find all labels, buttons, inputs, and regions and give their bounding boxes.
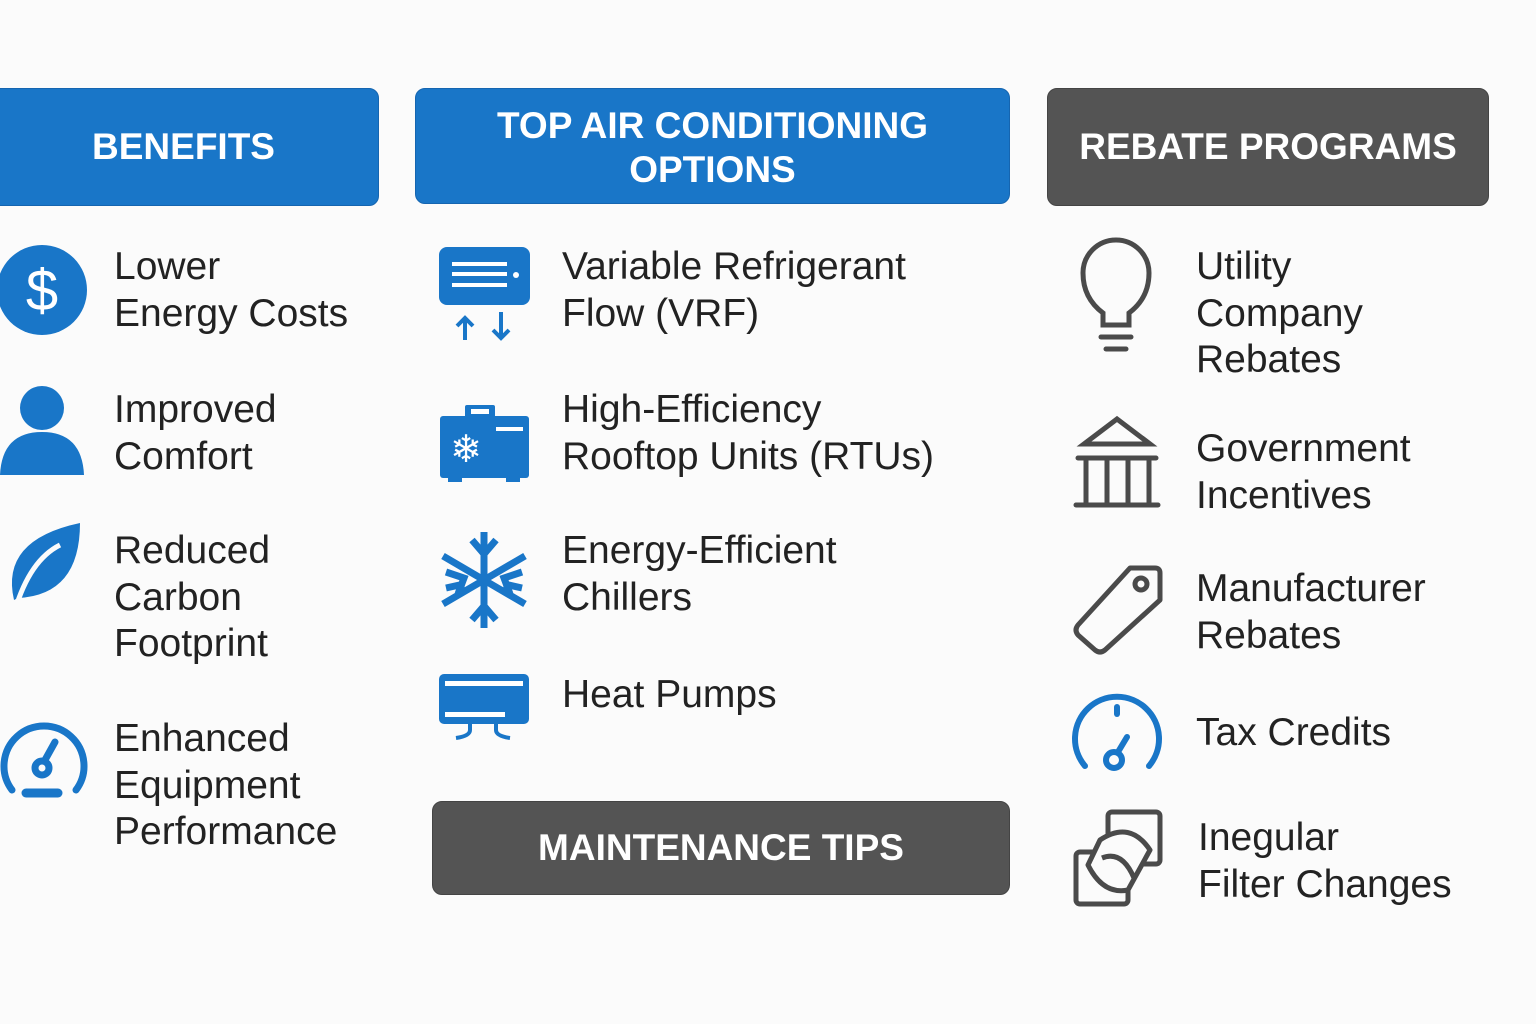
header: top air conditioning options: TOP AIR CONDITIONING [497, 105, 928, 146]
text: VRF: Flow (VRF) [562, 292, 759, 334]
icon: heat pump [439, 674, 529, 738]
text: utility rebates: Company [1196, 292, 1363, 334]
header: rebate programs [1047, 88, 1489, 206]
icon: dollar [0, 245, 87, 335]
text: enhanced equipment performance [114, 717, 337, 853]
text: chillers: Chillers [562, 576, 692, 618]
text: reduced carbon footprint: Carbon [114, 576, 242, 618]
header: top air conditioning options: OPTIONS [629, 149, 796, 190]
text: enhanced equipment performance: Performance [114, 810, 337, 853]
icon: price tag [1076, 568, 1160, 652]
text: RTUs: High-Efficiency [562, 388, 821, 431]
header: top air conditioning options [415, 88, 1010, 204]
text: RTUs: Rooftop Units (RTUs) [562, 434, 934, 478]
text: chillers [562, 529, 837, 618]
text: filter changes: Filter Changes [1198, 862, 1452, 906]
text: VRF: Variable Refrigerant [562, 245, 906, 288]
icon: government building [1076, 419, 1158, 505]
icon: person [0, 386, 84, 475]
header: benefits [0, 88, 379, 206]
icon: lightbulb [1083, 240, 1149, 349]
text: government incentives: Government [1196, 427, 1411, 470]
text: lower energy costs: Lower [114, 245, 220, 288]
text: manufacturer rebates [1196, 567, 1426, 656]
text: chillers: Energy-Efficient [562, 529, 837, 572]
icon: tax gauge [1075, 697, 1159, 768]
icon: dollar: $ [26, 258, 58, 323]
text: improved comfort [114, 388, 277, 478]
text: lower energy costs [114, 245, 348, 334]
text: reduced carbon footprint [114, 529, 270, 665]
icon: rooftop unit [440, 405, 529, 482]
text: tax credits: Tax Credits [1196, 711, 1391, 754]
header: rebate programs: REBATE PROGRAMS [1079, 126, 1457, 167]
text: utility rebates: Rebates [1196, 338, 1341, 381]
icon: leaf [12, 523, 80, 610]
text: utility rebates: Utility [1196, 245, 1291, 288]
header: maintenance tips [432, 801, 1010, 895]
text: heat pumps: Heat Pumps [562, 673, 777, 716]
icon: filter [1076, 812, 1160, 904]
text: enhanced equipment performance: Equipment [114, 764, 300, 806]
text: utility rebates [1196, 245, 1363, 381]
icon: vrf unit [439, 247, 530, 340]
text: government incentives [1196, 427, 1411, 516]
text: improved comfort: Comfort [114, 434, 253, 478]
header: maintenance tips: MAINTENANCE TIPS [538, 827, 904, 868]
header: benefits: BENEFITS [92, 126, 275, 167]
text: reduced carbon footprint: Reduced [114, 529, 270, 572]
text: filter changes [1198, 816, 1452, 906]
text: manufacturer rebates: Manufacturer [1196, 567, 1426, 610]
text: manufacturer rebates: Rebates [1196, 614, 1341, 656]
text: lower energy costs: Energy Costs [114, 292, 348, 334]
text: reduced carbon footprint: Footprint [114, 622, 268, 665]
text: government incentives: Incentives [1196, 474, 1372, 516]
text: VRF [562, 245, 906, 334]
text: RTUs [562, 388, 934, 478]
icon: rooftop unit: ❄ [450, 429, 482, 471]
icon: gauge [4, 726, 84, 793]
icon: snowflake [443, 532, 525, 628]
text: filter changes: Inegular [1198, 816, 1339, 859]
text: improved comfort: Improved [114, 388, 277, 431]
text: enhanced equipment performance: Enhanced [114, 717, 290, 760]
